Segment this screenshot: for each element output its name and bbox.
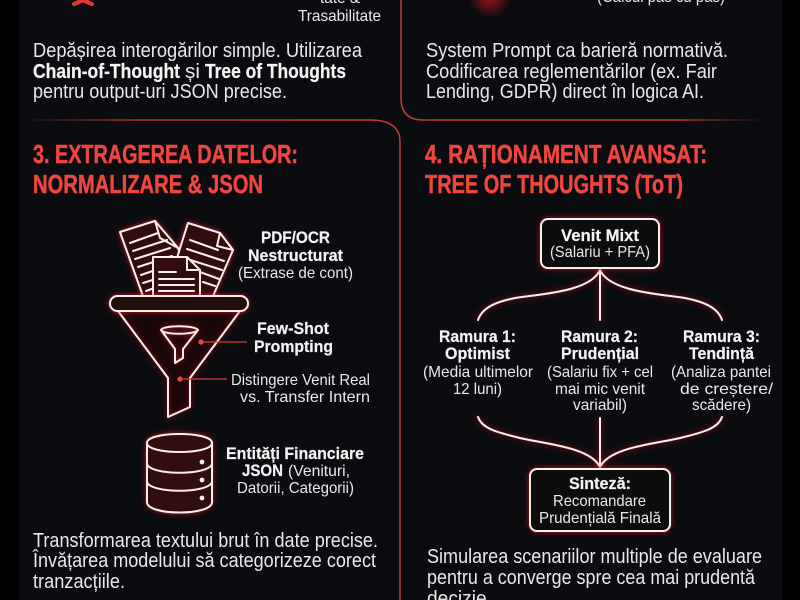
branch 2 label: Prudențial [561,344,639,363]
callout line: few-shot [198,339,247,345]
text block: panel 2 description: System Prompt ca barieră normativă. [426,40,728,62]
text block: panel 3 description [32,530,378,593]
text block: panel 4 description: pentru a converge spre cea mai prudentă [427,567,756,589]
node: sinteză: Recomandare [553,493,646,510]
label: PDF/OCR [238,228,353,282]
branch 1 label: (Media ultimelor [423,364,534,381]
text block: panel 2 description: Lending, GDPR) direct în logica AI. [426,81,704,103]
label: trasabilitate [298,0,381,25]
text block: panel 2 description [426,40,728,103]
branch 1 label [423,327,534,398]
branch 3 label: (Analiza pantei [671,364,771,381]
label: few-shot prompting [254,319,333,356]
text block: panel 4 description [427,546,762,600]
branch 3 label: scădere) [692,397,751,414]
branch 2 label: variabil) [573,397,627,414]
branch 3 label: Tendință [689,344,755,363]
node: sinteză: Prudențială Finală [539,510,661,527]
label: entități financiare [226,444,364,497]
label: entități financiare: Entități Financiare [226,444,364,463]
text block: panel 3 description: Transformarea textului brut în date precise. [33,530,378,552]
heading: panel 3 [33,139,298,199]
branch 2 label: (Salariu fix + cel [547,364,653,381]
callout line: distingere [177,376,227,382]
text block: panel 1 description: Depășirea interogărilor simple. Utilizarea [33,40,363,62]
branch 2 label: Ramura 2: [561,327,638,346]
label: PDF/OCR: PDF/OCR [261,228,330,247]
heading: panel 3: 3. EXTRAGEREA DATELOR: [33,139,298,169]
node: venit mixt: Venit Mixt [561,226,639,245]
text block: panel 1 description [33,40,363,103]
branch 2 label [547,327,653,414]
text block: panel 1 description: pentru output-uri JSON precise. [33,81,287,103]
label: PDF/OCR: (Extrase de cont) [238,265,353,282]
text block: panel 1 description: Chain-of-Thought [33,61,180,83]
document center [153,257,200,296]
label: few-shot prompting: Prompting [254,337,333,356]
label: entități financiare: JSON [242,461,283,480]
text block: panel 4 description: Simularea scenariilor multiple de evaluare [427,546,762,568]
label: trasabilitate: Trasabilitate [298,8,381,25]
branch 1 label: Ramura 1: [439,327,516,346]
label: distingere venit: vs. Transfer Intern [240,389,370,406]
branch 2 label: mai mic venit [555,381,646,398]
heading: panel 4: 4. RAȚIONAMENT AVANSAT: [425,139,707,169]
icon: red X top left [72,0,94,4]
label: PDF/OCR: Nestructurat [248,246,343,265]
icon: red glow top right [468,0,512,18]
branch 3 label [671,327,774,414]
label: few-shot prompting: Few-Shot [257,319,329,338]
panel border: top right panel [401,0,765,120]
node: sinteză [530,469,670,531]
branch 1 label: Optimist [445,344,510,363]
heading: panel 4 [425,139,707,199]
node: venit mixt: (Salariu + PFA) [550,244,650,261]
text block: panel 3 description: tranzacțiile. [33,571,125,593]
label: distingere venit: Distingere Venit Real [231,372,370,389]
label: entități financiare: (Venituri, [288,463,350,480]
icon: documents [120,221,233,296]
icon: small funnel [161,326,198,363]
branch 1 label: 12 luni) [453,381,502,398]
branch 3 label: de creștere/ [680,381,774,398]
text block: panel 1 description: Tree of Thoughts [205,61,346,83]
node: venit mixt [541,219,659,268]
document left [120,221,195,296]
text block: panel 3 description: Învățarea modelului să categorizeze corect [32,549,376,572]
text block: panel 2 description: Codificarea reglementărilor (ex. Fair [426,61,717,83]
heading: panel 4: TREE OF THOUGHTS (ToT) [425,169,683,199]
heading: panel 3: NORMALIZARE & JSON [33,169,263,199]
panel border: lower left panel [20,120,400,600]
icon: main funnel [110,296,248,417]
branch 3 label: Ramura 3: [683,327,760,346]
icon: database [147,434,212,512]
node: sinteză: Sinteză: [569,474,631,493]
document right [165,223,233,296]
label: distingere venit [231,372,370,406]
tree connector: bottom [478,417,722,467]
tree connector: top [478,270,722,320]
label: entități financiare: Datorii, Categorii) [237,480,354,497]
text block: panel 1 description: și [185,61,200,83]
